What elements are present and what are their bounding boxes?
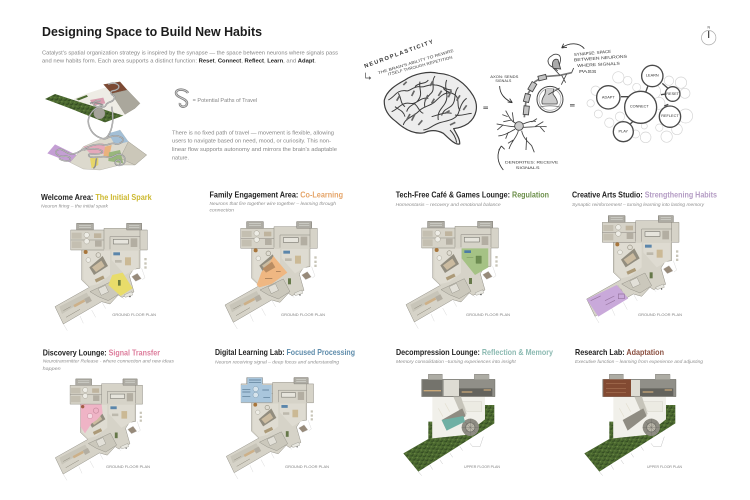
bubble diagram: RESET	[666, 92, 680, 96]
panel: discovery lounge: GROUND FLOOR PLAN	[106, 465, 150, 469]
synapse label: PASS	[579, 69, 597, 74]
panel: decompression lounge	[396, 348, 553, 476]
handwritten definition: ITSELF THROUGH REPETITION	[387, 55, 453, 77]
axon label: AXON: SENDS	[490, 74, 519, 79]
paragraph: no fixed path: users to navigate based on need, mood, or curiosity. This non-	[172, 139, 331, 145]
dendrites label: DENDRITES: RECEIVE	[505, 160, 559, 165]
panel: decompression lounge: Memory consolidation –turning experiences into insight	[396, 359, 516, 365]
paragraph: no fixed path: nature.	[172, 156, 189, 162]
panel: welcome area	[41, 193, 156, 331]
bubble diagram	[587, 65, 693, 143]
panel: family engagement area: GROUND FLOOR PLAN	[281, 313, 325, 317]
synapse label: SYNAPSE: SPACE	[574, 49, 611, 57]
paragraph: no fixed path	[172, 130, 337, 162]
intro text: and new habits form. Each area supports a distinct function: Reset , Connect , Reflect , Learn , and Adapt .	[42, 59, 316, 65]
neuroplasticity sketch	[364, 39, 693, 170]
bubble diagram: PLAY	[619, 130, 629, 134]
axon label: SIGNALS	[495, 78, 512, 83]
panel: creative arts studio: Synaptic reinforcement – turning learning into lasting memory	[572, 202, 705, 208]
panel: tech-free cafe and games lounge: GROUND FLOOR PLAN	[466, 313, 510, 317]
panel: decompression lounge: Decompression Lounge: Reflection & Memory	[396, 348, 553, 357]
panel: discovery lounge: Discovery Lounge: Signal Transfer	[43, 349, 161, 358]
panel: family engagement area	[210, 190, 343, 329]
panel: digital learning lab: Neuron receiving signal – deep focus and understanding	[215, 359, 339, 365]
icon: north arrow	[702, 25, 716, 45]
panel: digital learning lab: Digital Learning Lab: Focused Processing	[215, 348, 355, 357]
panel: family engagement area: Family Engagement Area: Co-Learning	[210, 190, 343, 199]
panel: discovery lounge: Neurotransmitter Release - where connection and new ideas	[43, 359, 175, 365]
dendrites label: SIGNALS	[516, 165, 540, 170]
panel: creative arts studio: GROUND FLOOR PLAN	[638, 313, 682, 317]
panel: digital learning lab	[215, 348, 355, 479]
title: Designing Space to Build New Habits	[42, 24, 262, 39]
panel: creative arts studio: Creative Arts Studio: Strengthening Habits	[572, 190, 717, 200]
handwritten definition	[366, 48, 455, 79]
panel: decompression lounge: UPPER FLOOR PLAN	[464, 465, 500, 469]
panel: research lab: Research Lab: Adaptation	[575, 348, 664, 357]
panel: discovery lounge: happen	[43, 366, 61, 372]
bubble diagram: REFLECT	[661, 114, 679, 118]
heading: neuroplasticity: NEUROPLASTICITY	[364, 39, 434, 70]
bubble diagram: LEARN	[646, 74, 659, 78]
bubble diagram: CONNECT	[630, 104, 649, 108]
handwritten definition: THE BRAIN'S ABILITY TO REWIRE	[377, 48, 455, 75]
panel: research lab	[575, 348, 703, 476]
panel: tech-free cafe and games lounge: Tech-Free Café & Games Lounge: Regulation	[396, 190, 549, 200]
equals sign	[483, 105, 575, 108]
panel: welcome area: Neuron firing – the initial spark	[41, 204, 109, 210]
panel: research lab: Executive function – learning from experience and adjusting	[575, 359, 703, 365]
icon: north arrow: N	[707, 25, 710, 29]
intro text: Catalyst's spatial organization strategy is inspired by the synapse — the space between neurons where signals pass	[42, 50, 339, 56]
synapse label	[574, 49, 628, 74]
panel: welcome area: GROUND FLOOR PLAN	[112, 313, 156, 317]
bubble diagram: ADAPT	[602, 96, 615, 100]
axonometric diagram with travel paths	[45, 82, 147, 170]
dendrites label	[505, 160, 559, 170]
neuron sketch	[497, 54, 574, 152]
axon label	[490, 74, 519, 83]
panel: family engagement area: Neurons that fire together wire together – learning through	[210, 201, 336, 207]
synapse detail circle	[537, 86, 563, 112]
panel: tech-free cafe and games lounge: Homeostasis – recovery and emotional balance	[396, 202, 501, 208]
panel: welcome area: Welcome Area: The Initial Spark	[41, 193, 152, 202]
panel: digital learning lab: GROUND FLOOR PLAN	[285, 465, 329, 469]
paragraph: no fixed path: linear flow supports autonomy and mirrors the brain's adaptable	[172, 147, 337, 153]
panel: family engagement area: connection	[210, 208, 234, 214]
panel: discovery lounge	[43, 349, 175, 480]
panel: research lab: UPPER FLOOR PLAN	[647, 465, 682, 469]
sketch arrows	[498, 44, 584, 170]
brain sketch	[384, 72, 476, 144]
legend label: = Potential Paths of Travel	[193, 98, 257, 104]
synapse label: BETWEEN NEURONS	[574, 54, 628, 62]
intro text	[42, 50, 339, 65]
paragraph: no fixed path: There is no fixed path of travel — movement is flexible, allowing	[172, 130, 334, 136]
panel: tech-free cafe and games lounge	[396, 190, 549, 329]
icon: path of travel legend	[176, 90, 188, 107]
panel: creative arts studio	[572, 190, 717, 323]
synapse label: WHERE SIGNALS	[577, 61, 620, 68]
